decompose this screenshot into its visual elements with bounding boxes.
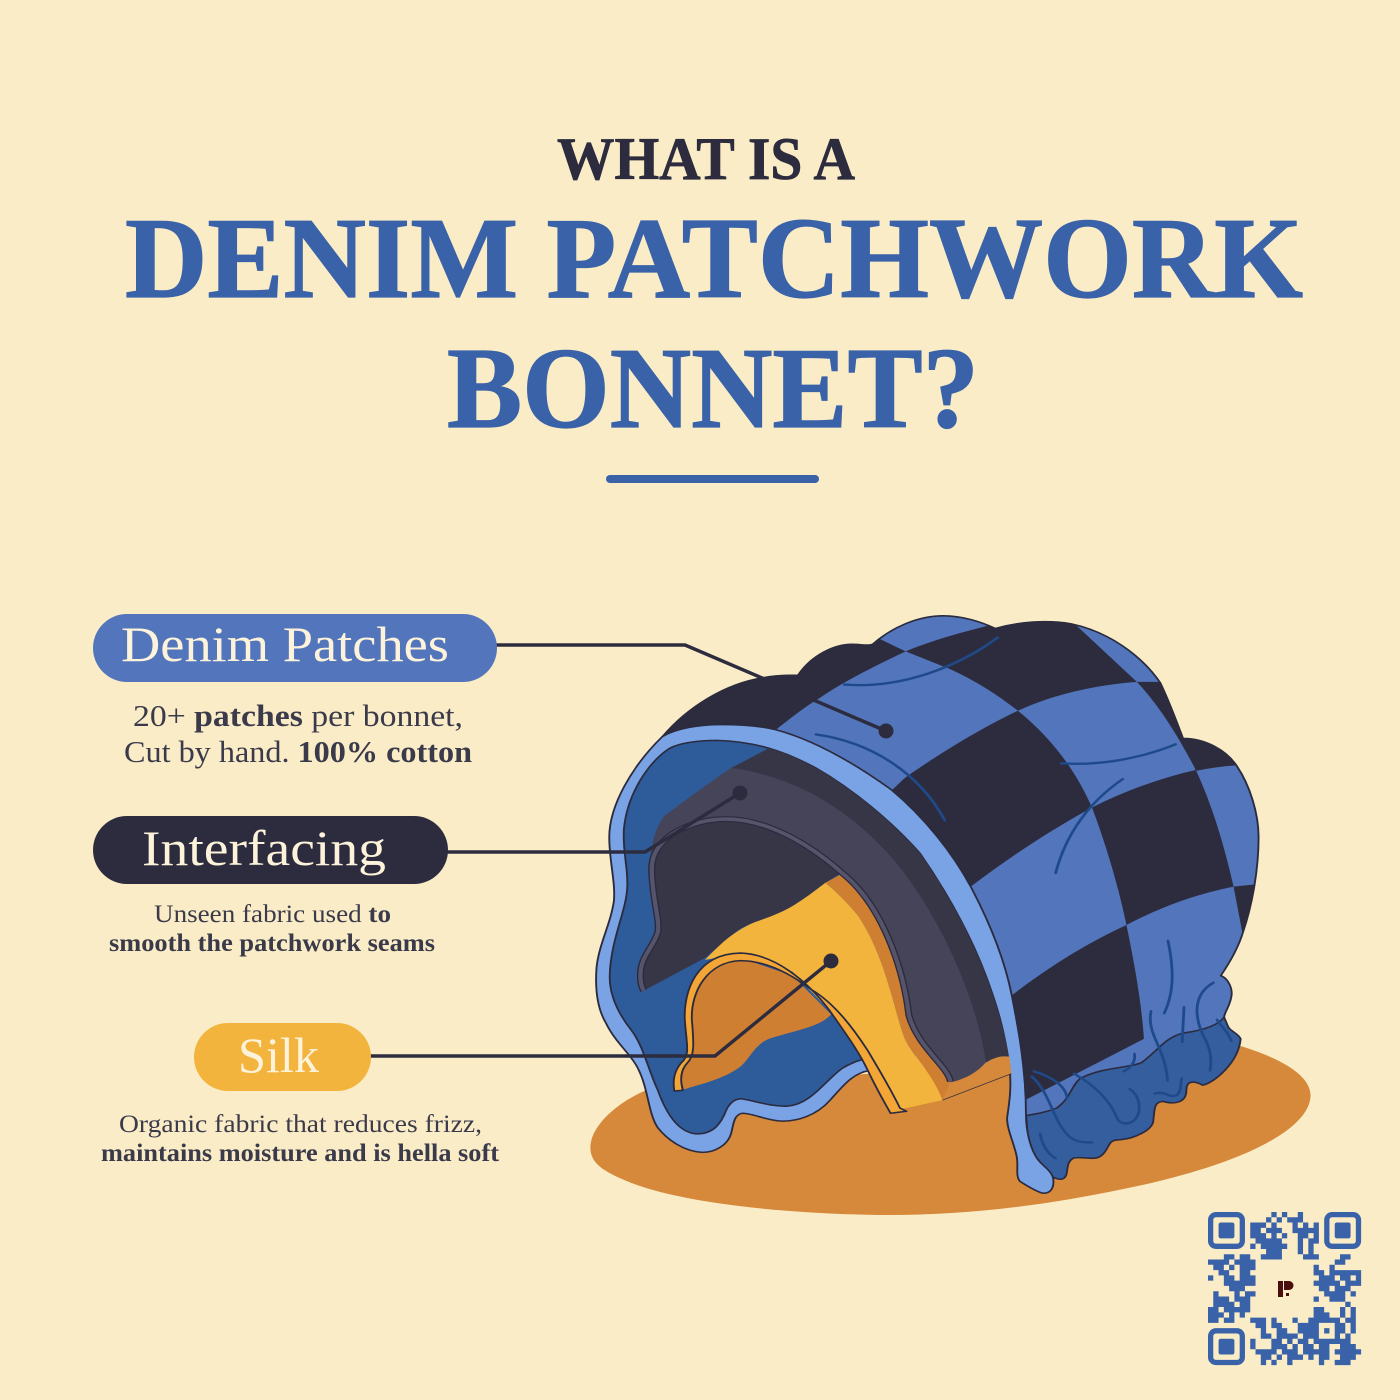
ground seam line	[942, 1074, 1011, 1100]
description line 2: Cut by hand. 100% cotton	[124, 734, 472, 769]
pill: silk	[194, 1023, 371, 1091]
ground seen through bonnet opening	[942, 1056, 1011, 1100]
callout: silk	[101, 954, 838, 1167]
pill: interfacing	[93, 816, 448, 884]
leader line: interfacing	[447, 793, 740, 852]
interfacing light band	[651, 768, 986, 1082]
interfacing edge stripe outline	[640, 819, 950, 1082]
inner blue lining	[610, 740, 1009, 1134]
description: silk	[101, 1111, 500, 1167]
interfacing inner dark panel	[640, 819, 842, 991]
QR finder patterns	[1211, 1215, 1358, 1362]
pill label: interfacing: Interfacing	[142, 820, 386, 876]
leader dot: silk	[824, 954, 838, 968]
pill label: silk: Silk	[238, 1027, 319, 1083]
pill label: denim patches: Denim Patches	[121, 616, 449, 672]
description: denim patches	[124, 698, 472, 769]
title line: what is a: WHAT IS A	[557, 126, 855, 192]
leader dot: interfacing	[732, 786, 748, 800]
ruffle	[1026, 1017, 1241, 1179]
QR data modules	[1208, 1212, 1361, 1365]
leader line: silk	[370, 961, 831, 1056]
description: interfacing	[109, 901, 435, 957]
silk dark fold	[825, 874, 950, 1100]
QR centre logo	[1278, 1281, 1294, 1297]
silk underside	[680, 958, 831, 1090]
title	[125, 126, 1303, 453]
leader line: denim patches	[496, 645, 886, 731]
interfacing edge stripe	[640, 819, 950, 1082]
title underline	[606, 475, 819, 483]
stitches	[816, 638, 1231, 1158]
illustration: bonnet on orange ground	[590, 616, 1311, 1215]
title line: bonnet: BONNET?	[447, 325, 979, 453]
rim binding	[596, 725, 1053, 1193]
title line: denim patchwork: DENIM PATCHWORK	[125, 195, 1303, 323]
description line 2: maintains moisture and is hella soft	[101, 1140, 500, 1167]
silk edge binding	[674, 953, 907, 1113]
description line 2: smooth the patchwork seams	[109, 930, 435, 957]
QR code	[1208, 1212, 1361, 1365]
interfacing outer band	[731, 748, 1008, 1063]
ground ellipse	[590, 1046, 1311, 1215]
description line 1: Organic fabric that reduces frizz,	[119, 1111, 482, 1138]
silk yellow panel	[705, 883, 942, 1109]
callout: denim patches	[93, 614, 894, 769]
QR finder centres	[1219, 1223, 1351, 1355]
description line 1: Unseen fabric used to	[154, 901, 391, 928]
callout: interfacing	[93, 786, 748, 957]
leader dot: denim patches	[878, 724, 894, 738]
pill: denim patches	[93, 614, 497, 682]
cloth base	[663, 616, 1259, 1116]
description line 1: 20+ patches per bonnet,	[133, 698, 463, 733]
dark check patches	[651, 616, 1260, 1102]
